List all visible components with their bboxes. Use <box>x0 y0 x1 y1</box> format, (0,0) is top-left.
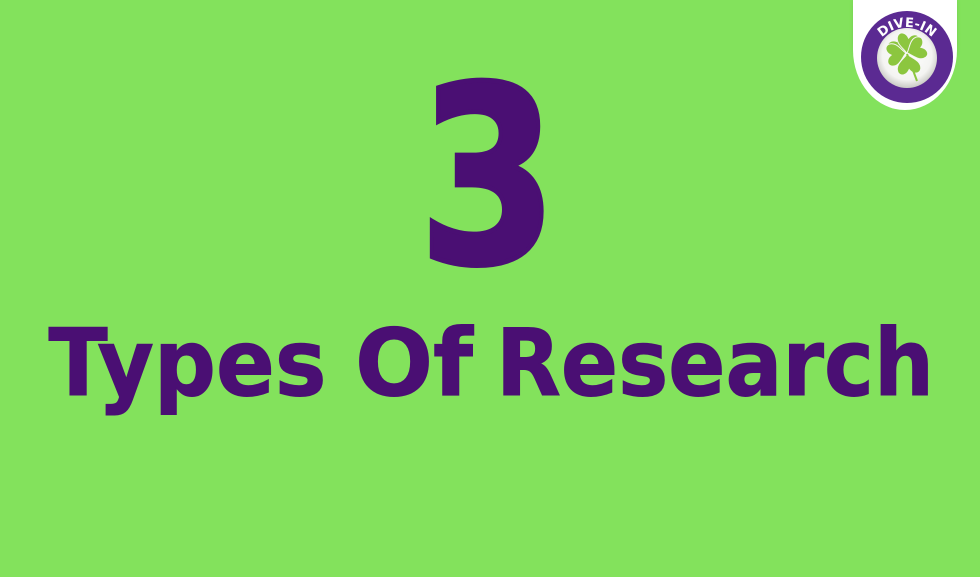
badge: Dive-In logo <box>852 0 958 110</box>
heading: Types Of Research: Types <box>48 309 326 417</box>
badge white tab <box>853 0 957 110</box>
icon: four leaf clover <box>885 31 929 81</box>
heading: Types Of Research: Of <box>355 309 475 417</box>
big numeral 3: 3 <box>418 35 558 320</box>
ring label: DIVE-IN <box>876 17 937 36</box>
heading: Types Of Research: Research <box>496 309 934 417</box>
badge shadow <box>855 0 955 99</box>
heading: Types Of Research <box>48 309 934 417</box>
clover disc <box>877 28 937 88</box>
purple ring <box>861 11 953 103</box>
